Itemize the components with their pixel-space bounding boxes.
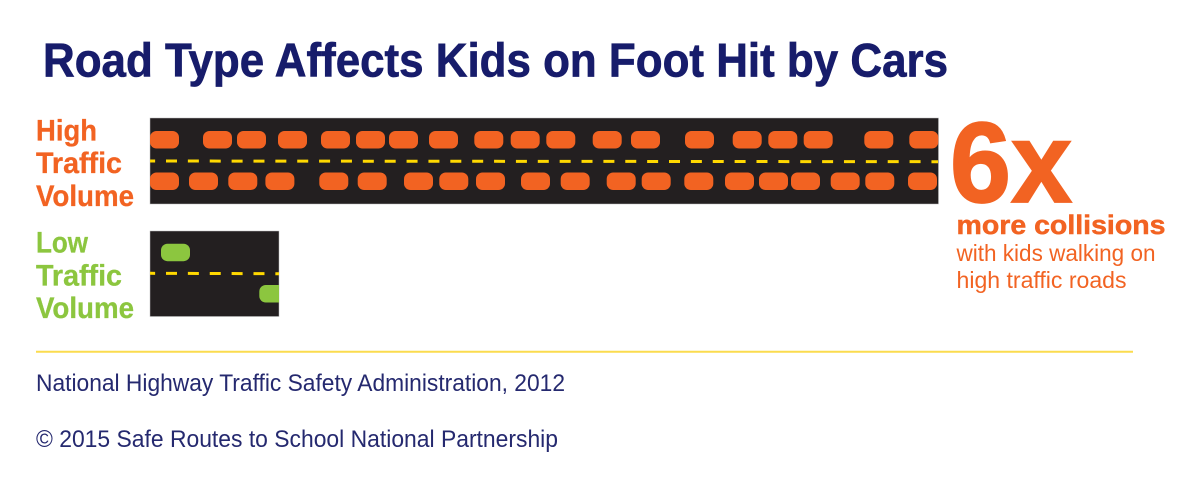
cars: top lane	[150, 131, 938, 148]
callout: 6x more collisions	[950, 100, 1166, 293]
statistic: 6x: 6x	[950, 100, 1072, 227]
copyright: © 2015 Safe Routes to School National Partnership	[36, 426, 558, 453]
callout text: high traffic roads	[956, 267, 1126, 293]
title: Road Type Affects Kids on Foot Hit by Cars	[43, 34, 948, 86]
label: low traffic volume	[36, 226, 134, 325]
callout heading: more collisions	[956, 210, 1166, 240]
label: high traffic volume: Volume	[36, 180, 134, 213]
source citation: National Highway Traffic Safety Administration, 2012	[36, 370, 565, 397]
road: low traffic	[150, 231, 279, 316]
car: top lane	[161, 244, 190, 261]
label: high traffic volume: Traffic	[36, 147, 122, 180]
cars: bottom lane	[150, 172, 937, 190]
car: bottom lane	[259, 285, 279, 302]
lane divider: high traffic	[150, 160, 938, 163]
callout text: with kids walking on	[956, 240, 1156, 266]
lane divider: low traffic	[150, 272, 279, 275]
label: high traffic volume: High	[36, 114, 97, 148]
label: low traffic volume: Volume	[36, 292, 134, 325]
label: high traffic volume	[36, 114, 134, 213]
road: high traffic	[150, 118, 938, 204]
label: low traffic volume: Low	[36, 226, 89, 260]
label: low traffic volume: Traffic	[36, 260, 122, 292]
callout text	[956, 240, 1156, 293]
